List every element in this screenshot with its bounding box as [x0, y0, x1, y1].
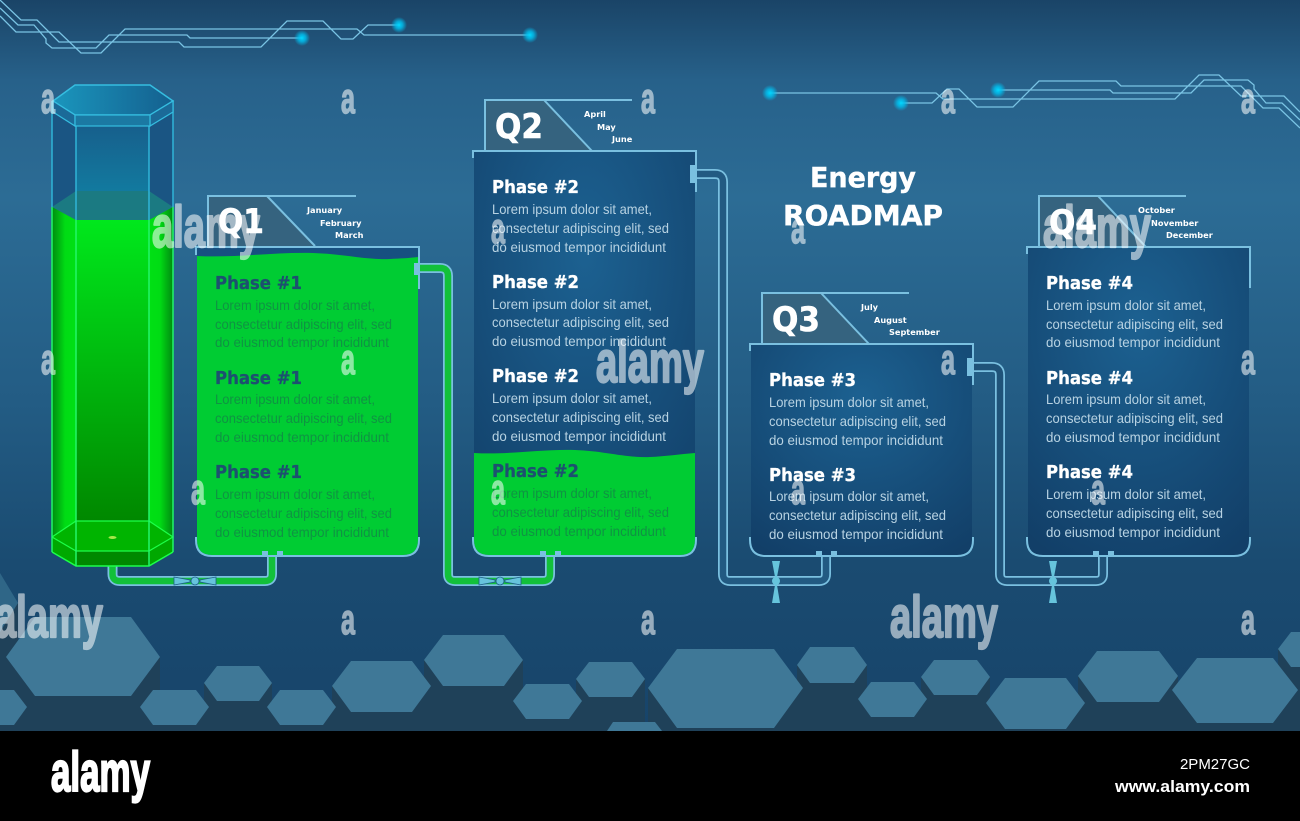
Q1 phase text: do eiusmod tempor incididunt	[215, 429, 389, 445]
Q4 tab	[1039, 196, 1214, 247]
Q1 phase text: do eiusmod tempor incididunt	[215, 334, 389, 350]
Q2 tab	[485, 100, 633, 151]
Q4 tab: November	[1151, 218, 1199, 228]
Q2 green fill	[474, 450, 695, 555]
Q3 phase text: consectetur adipiscing elit, sed	[769, 507, 946, 523]
Q2 phase text: consectetur adipiscing elit, sed	[492, 504, 669, 520]
Q2 tab: June	[611, 134, 633, 144]
watermark: a	[1241, 75, 1256, 123]
Q2 phase text	[492, 178, 669, 539]
Q1 tab	[208, 196, 364, 246]
watermark: a	[491, 466, 506, 514]
Q1 tab: March	[335, 230, 364, 240]
Q1 phase text: consectetur adipiscing elit, sed	[215, 505, 392, 521]
footer image id: 2PM27GC	[1180, 756, 1250, 773]
watermark	[0, 75, 1256, 650]
Q2 tab: April	[584, 109, 606, 119]
tank upper glass	[52, 115, 173, 220]
Q1 phase text: Phase #1	[215, 274, 302, 294]
Q2 phase text: do eiusmod tempor incididunt	[492, 333, 666, 349]
Q2 phase text: consectetur adipiscing elit, sed	[492, 409, 669, 425]
watermark: a	[791, 466, 806, 514]
Q4 phase text: consectetur adipiscing elit, sed	[1046, 505, 1223, 521]
circuit lines top right	[762, 75, 1300, 128]
Q4 phase text: Lorem ipsum dolor sit amet,	[1046, 486, 1206, 502]
watermark: a	[1091, 466, 1106, 514]
watermark: a	[941, 75, 956, 123]
tank bottom	[52, 521, 173, 566]
Q3 tab: Q3	[772, 300, 820, 340]
Q3 phase text: do eiusmod tempor incididunt	[769, 526, 943, 542]
watermark: a	[641, 75, 656, 123]
watermark: a	[341, 336, 356, 384]
panel: Q4	[1027, 196, 1250, 556]
tank edges	[52, 101, 173, 566]
liquid left side	[52, 207, 76, 566]
Q2 tab: May	[597, 122, 616, 132]
pipe: Q1 to Q2	[416, 268, 550, 581]
Q3 phase text	[769, 371, 946, 542]
title: Energy	[810, 161, 916, 194]
Q3 phase text: Phase #3	[769, 466, 856, 486]
watermark: a	[941, 336, 956, 384]
watermark: a	[791, 205, 806, 253]
footer url: www.alamy.com	[1114, 778, 1250, 796]
pipe: Q3 to Q4	[969, 367, 1103, 581]
Q2 phase text: do eiusmod tempor incididunt	[492, 523, 666, 539]
watermark: alamy	[596, 330, 704, 395]
footer logo: alamy	[51, 740, 150, 803]
Q1 flanges	[262, 263, 419, 556]
watermark: a	[1241, 596, 1256, 644]
Q2 phase text: Phase #2	[492, 178, 579, 198]
pipe: tank to Q1	[112, 552, 272, 581]
Q1 phase text: Lorem ipsum dolor sit amet,	[215, 391, 375, 407]
panel: Q1	[196, 196, 419, 556]
Q2 phase text: Lorem ipsum dolor sit amet,	[492, 485, 652, 501]
Q3 phase text: Lorem ipsum dolor sit amet,	[769, 488, 929, 504]
Q2 phase text: consectetur adipiscing elit, sed	[492, 220, 669, 236]
footer band	[0, 731, 1300, 821]
Q1 phase text: consectetur adipiscing elit, sed	[215, 410, 392, 426]
Q4 phase text: consectetur adipiscing elit, sed	[1046, 316, 1223, 332]
Q2 phase text: Phase #2	[492, 462, 579, 482]
Q4 tab: Q4	[1049, 203, 1097, 243]
tank side shading	[52, 101, 76, 220]
Q3 outline	[750, 344, 973, 556]
watermark: alamy	[1043, 195, 1151, 260]
watermark: a	[491, 205, 506, 253]
Q2 tab: Q2	[495, 107, 543, 147]
Q1 phase text	[215, 274, 392, 540]
Q4 tab: October	[1138, 205, 1176, 215]
Q2 phase text: do eiusmod tempor incididunt	[492, 428, 666, 444]
title	[783, 161, 943, 232]
Q4 phase text	[1046, 274, 1223, 540]
Q1 phase text: do eiusmod tempor incididunt	[215, 524, 389, 540]
Q4 flanges	[1093, 551, 1114, 556]
Q4 phase text: do eiusmod tempor incididunt	[1046, 334, 1220, 350]
liquid body	[76, 220, 149, 566]
Q1 phase text: Phase #1	[215, 463, 302, 483]
watermark: alamy	[890, 585, 998, 650]
Q1 green fill	[197, 253, 418, 555]
Q1 phase text: consectetur adipiscing elit, sed	[215, 316, 392, 332]
Q4 tab: December	[1166, 230, 1214, 240]
Q2 phase text: Lorem ipsum dolor sit amet,	[492, 296, 652, 312]
Q2 phase text: Phase #2	[492, 273, 579, 293]
watermark: a	[41, 75, 56, 123]
Q2 outline	[473, 151, 696, 556]
watermark: a	[341, 75, 356, 123]
Q4 body	[1028, 248, 1249, 555]
Q1 outline	[196, 247, 419, 556]
Q1 phase text: Lorem ipsum dolor sit amet,	[215, 486, 375, 502]
Q1 phase text: Lorem ipsum dolor sit amet,	[215, 297, 375, 313]
watermark: alamy	[152, 195, 260, 260]
Q4 phase text: do eiusmod tempor incididunt	[1046, 429, 1220, 445]
Q3 tab	[762, 293, 941, 344]
panel: Q2	[473, 100, 696, 556]
title: ROADMAP	[783, 199, 943, 232]
Q4 phase text: Lorem ipsum dolor sit amet,	[1046, 297, 1206, 313]
tank lid	[53, 85, 173, 126]
Q3 tab: July	[860, 302, 879, 312]
circuit lines top left	[0, 0, 538, 53]
watermark: a	[41, 336, 56, 384]
liquid right side	[149, 207, 173, 566]
valve: Q3 pipe	[1049, 561, 1057, 603]
Q3 flanges	[816, 358, 973, 556]
Q2 phase text: consectetur adipiscing elit, sed	[492, 314, 669, 330]
hexagon pattern	[0, 573, 1300, 731]
Q4 phase text: do eiusmod tempor incididunt	[1046, 524, 1220, 540]
watermark: a	[191, 466, 206, 514]
Q2 phase text: Phase #2	[492, 367, 579, 387]
Q2 phase text: Lorem ipsum dolor sit amet,	[492, 390, 652, 406]
Q2 body	[474, 152, 695, 555]
Q3 body	[751, 345, 972, 555]
Q1 tab: January	[306, 205, 343, 215]
valve: Q2 pipe	[772, 561, 780, 603]
liquid surface	[52, 191, 173, 220]
Q1 phase text: Phase #1	[215, 369, 302, 389]
Q3 phase text: do eiusmod tempor incididunt	[769, 432, 943, 448]
valve: tank pipe	[174, 577, 216, 585]
watermark: a	[1241, 336, 1256, 384]
Q4 phase text: Phase #4	[1046, 274, 1133, 294]
Q2 flanges	[540, 165, 696, 556]
Q4 phase text: Phase #4	[1046, 463, 1133, 483]
Q4 phase text: Phase #4	[1046, 369, 1133, 389]
Q3 tab: September	[889, 327, 941, 337]
valve: Q1 pipe	[479, 577, 521, 585]
pipe: Q2 to Q3	[692, 174, 826, 581]
hexagon shadow columns	[0, 603, 1300, 731]
Q4 phase text: consectetur adipiscing elit, sed	[1046, 410, 1223, 426]
Q2 phase text: do eiusmod tempor incididunt	[492, 239, 666, 255]
panel: Q3	[750, 293, 973, 556]
Q2 phase text: Lorem ipsum dolor sit amet,	[492, 201, 652, 217]
Q1 tab: February	[320, 218, 362, 228]
Q3 phase text: Lorem ipsum dolor sit amet,	[769, 394, 929, 410]
Q4 outline	[1027, 247, 1250, 556]
Q3 phase text: consectetur adipiscing elit, sed	[769, 413, 946, 429]
Q3 phase text: Phase #3	[769, 371, 856, 391]
watermark: a	[641, 596, 656, 644]
Q4 phase text: Lorem ipsum dolor sit amet,	[1046, 391, 1206, 407]
Q3 tab: August	[874, 315, 907, 325]
tank	[52, 85, 173, 566]
Q1 body	[197, 247, 418, 555]
Q1 tab: Q1	[218, 202, 264, 242]
watermark: a	[341, 596, 356, 644]
